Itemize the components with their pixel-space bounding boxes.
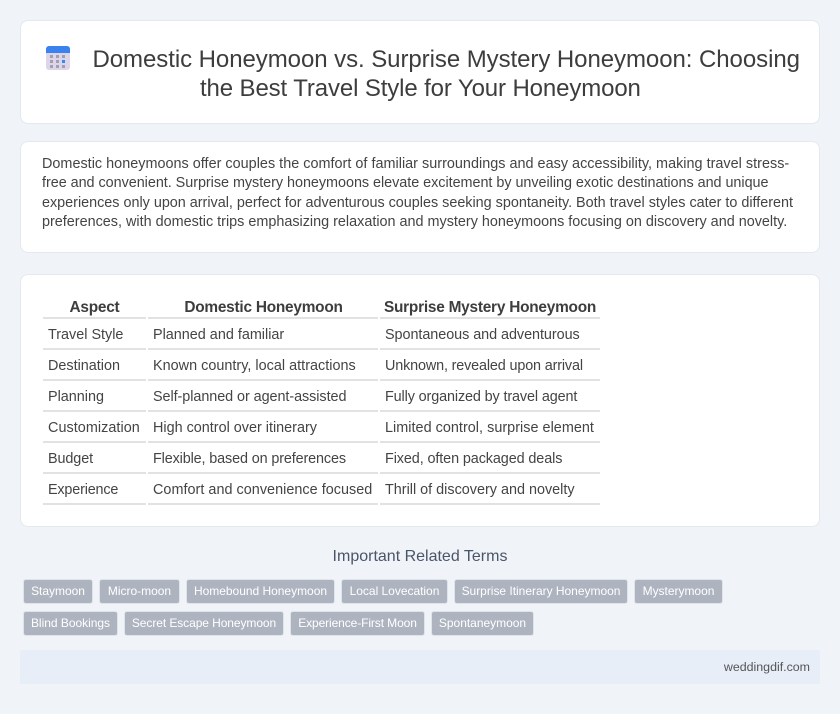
footer: source: weddingdif.com (724, 660, 810, 674)
tag: Local Lovecation (350, 584, 439, 598)
icon: calendar (46, 46, 70, 70)
cell: Limited control, surprise element (385, 420, 594, 436)
tag: Staymoon (31, 584, 85, 598)
cell: Unknown, revealed upon arrival (385, 358, 583, 374)
text block: introduction: preferences, with domestic trips emphasizing relaxation and mystery honeymoons focusing on discovery and novelty. (42, 214, 787, 230)
table header: surprise mystery honeymoon: Surprise Mystery Honeymoon (384, 299, 596, 316)
tag: Blind Bookings (31, 616, 110, 630)
tag (454, 579, 628, 604)
title: Domestic Honeymoon vs. Surprise Mystery Honeymoon: Choosing (92, 46, 800, 73)
cell: Known country, local attractions (153, 358, 356, 374)
cell: Comfort and convenience focused (153, 482, 372, 498)
cell: High control over itinerary (153, 420, 317, 436)
text block: introduction: experiences only upon arrival, perfect for adventurous couples seeking spontaneity. Both travel styles cater to different (42, 195, 793, 211)
title (92, 46, 800, 102)
text block: introduction: free and convenient. Surprise mystery honeymoons elevate excitement by unveiling exotic destinations and unique (42, 175, 768, 191)
cell: Spontaneous and adventurous (385, 327, 580, 343)
table header: aspect: Aspect (70, 299, 119, 316)
cell: Fully organized by travel agent (385, 389, 577, 405)
tag (124, 611, 284, 636)
tag: Micro-moon (108, 584, 171, 598)
tag (186, 579, 335, 604)
cell: Fixed, often packaged deals (385, 451, 562, 467)
tag: Secret Escape Honeymoon (132, 616, 276, 630)
tag (341, 579, 448, 604)
title: the Best Travel Style for Your Honeymoon (200, 75, 641, 102)
comparison table (43, 299, 600, 505)
table header: domestic honeymoon: Domestic Honeymoon (184, 299, 343, 316)
tag (23, 611, 118, 636)
tag (634, 579, 723, 604)
row: budget: Budget (48, 451, 93, 467)
tag (99, 579, 180, 604)
tag (431, 611, 534, 636)
footer bar (20, 650, 820, 684)
tag: Homebound Honeymoon (194, 584, 327, 598)
panel: header (20, 20, 820, 124)
tag: Experience-First Moon (298, 616, 417, 630)
panel: introduction (20, 141, 820, 253)
panel: comparison table (20, 274, 820, 527)
tag (290, 611, 425, 636)
text block: introduction: Domestic honeymoons offer couples the comfort of familiar surroundings and easy accessibility, making travel stress- (42, 156, 789, 172)
tags: related terms (23, 579, 723, 636)
tag: Surprise Itinerary Honeymoon (462, 584, 620, 598)
row: customization: Customization (48, 420, 140, 436)
row: travel style: Travel Style (48, 327, 123, 343)
row: planning: Planning (48, 389, 104, 405)
text block: introduction (42, 156, 793, 230)
cell: Self-planned or agent-assisted (153, 389, 346, 405)
cell: Thrill of discovery and novelty (385, 482, 575, 498)
cell: Flexible, based on preferences (153, 451, 346, 467)
row: experience: Experience (48, 482, 118, 498)
heading: important related terms: Important Related Terms (333, 548, 507, 565)
tag: Mysterymoon (643, 584, 714, 598)
tag: Spontaneymoon (439, 616, 526, 630)
row: destination: Destination (48, 358, 120, 374)
tag (23, 579, 93, 604)
cell: Planned and familiar (153, 327, 284, 343)
